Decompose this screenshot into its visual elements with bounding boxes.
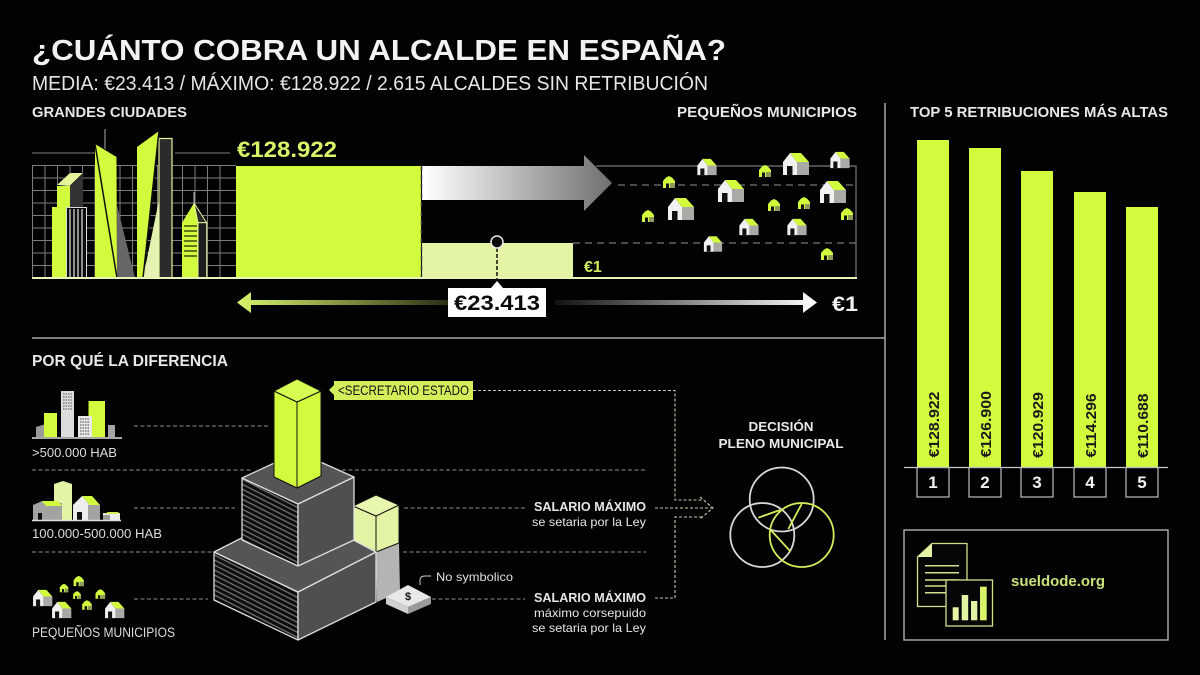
isometric salary blocks bbox=[214, 379, 400, 640]
panel: por qué la diferencia bbox=[32, 353, 844, 640]
heading: TOP 5 RETRIBUCIONES MÁS ALTAS bbox=[910, 104, 1168, 121]
label: >500.000 hab: >500.000 HAB bbox=[32, 445, 117, 460]
label: salario máximo 1: se setaria por la Ley bbox=[532, 515, 646, 529]
icon: document and chart bbox=[918, 544, 992, 626]
rank numbers: 5 bbox=[1137, 473, 1147, 492]
subtitle: MEDIA: €23.413 / MÁXIMO: €128.922 / 2.615 ALCALDES SIN RETRIBUCIÓN bbox=[32, 72, 708, 95]
connector arrow to decision bbox=[473, 390, 713, 598]
average marker bbox=[448, 236, 546, 317]
label: no symbolico: No symbolico bbox=[436, 570, 513, 584]
label: 100.000-500.000 hab: 100.000-500.000 HAB bbox=[32, 526, 162, 541]
source link text: sueldode.org bbox=[1011, 574, 1105, 590]
bar 4 bbox=[1074, 192, 1106, 467]
bar 1 bbox=[917, 140, 949, 467]
icon: mid city bbox=[32, 481, 121, 520]
heading: decisión pleno municipal: DECISIÓN bbox=[748, 419, 814, 434]
value: right end: €1 bbox=[832, 293, 858, 316]
title: ¿CUÁNTO COBRA UN ALCALDE EN ESPAÑA? bbox=[32, 33, 726, 67]
value: max: €128.922 bbox=[237, 137, 337, 162]
label: salario máximo 2: máximo corsepuido bbox=[534, 606, 646, 620]
icon: large city bbox=[32, 391, 122, 438]
range arrow left bbox=[237, 292, 450, 313]
label: salario máximo 2: SALARIO MÁXIMO bbox=[534, 590, 646, 605]
label: salario máximo 1: SALARIO MÁXIMO bbox=[534, 499, 646, 514]
frame: small municipalities bbox=[596, 166, 856, 278]
bar 2: €126.900 bbox=[978, 391, 995, 458]
heading: pequeños municipios: PEQUEÑOS MUNICIPIOS bbox=[677, 103, 857, 121]
heading: POR QUÉ LA DIFERENCIA bbox=[32, 353, 228, 370]
rank numbers bbox=[928, 473, 1147, 492]
heading: grandes ciudades: GRANDES CIUDADES bbox=[32, 105, 187, 121]
bar 1: €128.922 bbox=[926, 392, 943, 458]
average marker: €23.413 bbox=[454, 292, 540, 315]
arrow: gradient decline bbox=[422, 155, 612, 211]
rank boxes bbox=[917, 468, 1158, 497]
bar 4: €114.296 bbox=[1083, 394, 1100, 458]
icon: dollar tile: $ bbox=[405, 591, 411, 603]
callout: secretario estado bbox=[329, 381, 473, 400]
city skyline with grid bbox=[32, 129, 236, 278]
rank numbers: 2 bbox=[980, 473, 990, 492]
callout: secretario estado: <SECRETARIO ESTADO bbox=[338, 383, 469, 398]
label: salario máximo 1 bbox=[532, 499, 646, 529]
bar 2 bbox=[969, 148, 1001, 467]
bar 5 bbox=[1126, 207, 1158, 467]
rank numbers: 1 bbox=[928, 473, 938, 492]
heading: decisión pleno municipal: PLENO MUNICIPAL bbox=[718, 436, 844, 451]
panel: top 5 bbox=[904, 104, 1168, 497]
label: salario máximo 2: se setaria por la Ley bbox=[532, 621, 646, 635]
label: pequeños municipios: PEQUEÑOS MUNICIPIOS bbox=[32, 625, 175, 640]
bar: maximum salary bbox=[236, 166, 421, 278]
range arrow right bbox=[555, 292, 817, 313]
label: salario máximo 2 bbox=[532, 590, 646, 635]
rank numbers: 3 bbox=[1032, 473, 1042, 492]
bar 3: €120.929 bbox=[1030, 392, 1047, 458]
value: one euro: €1 bbox=[584, 259, 602, 276]
baseline bbox=[32, 277, 857, 279]
source box bbox=[904, 530, 1168, 640]
houses bbox=[642, 152, 853, 260]
icon: small towns bbox=[33, 576, 124, 618]
rank numbers: 4 bbox=[1085, 473, 1095, 492]
panel: grandes ciudades vs pequeños municipios bbox=[32, 103, 858, 317]
bar 5: €110.688 bbox=[1135, 394, 1152, 458]
icon: dollar tile bbox=[386, 585, 431, 614]
venn diagram bbox=[730, 468, 834, 567]
bar 3 bbox=[1021, 171, 1053, 467]
bar: average salary bbox=[422, 243, 573, 278]
heading: decisión pleno municipal bbox=[718, 419, 844, 451]
